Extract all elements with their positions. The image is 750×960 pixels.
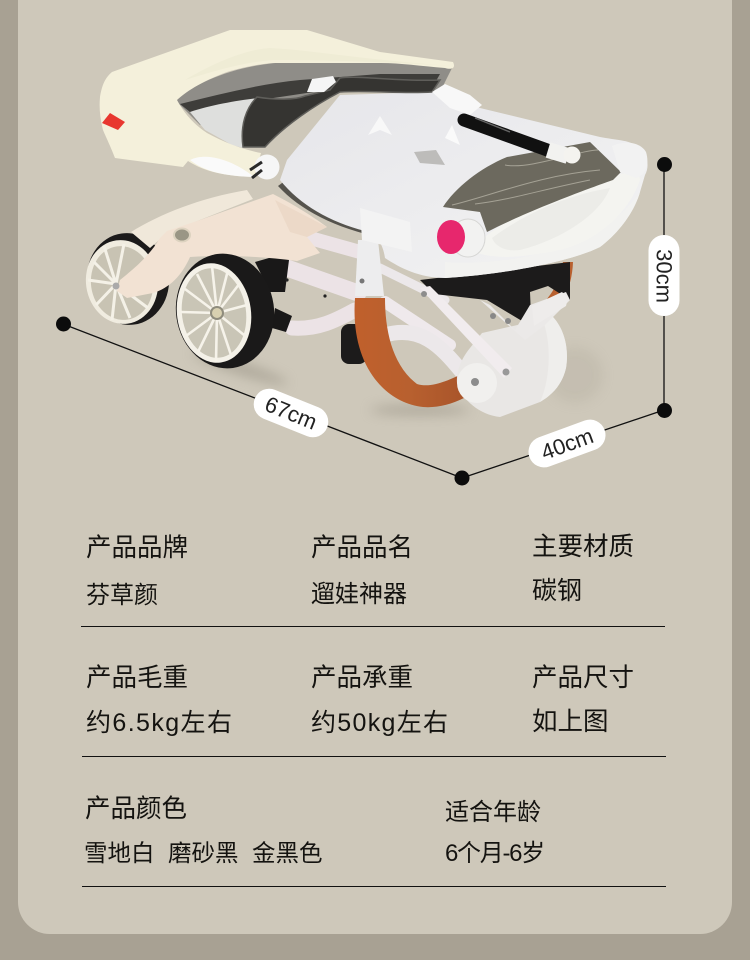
dimension: height 30cm: 30cm bbox=[652, 249, 676, 303]
seat shell bbox=[280, 92, 648, 278]
dark rim under seat bbox=[278, 180, 382, 238]
seat belt housing bbox=[360, 208, 412, 252]
post bbox=[355, 240, 384, 296]
canopy interior bbox=[175, 62, 453, 125]
size value: 如上图 bbox=[532, 708, 609, 736]
beige side rail bbox=[131, 190, 253, 248]
peach arm and fork bbox=[117, 194, 327, 298]
spec row 3: colours: 产品颜色 bbox=[85, 795, 187, 823]
colour values: 雪地白 bbox=[84, 840, 154, 866]
spec row 2: load: 产品承重 bbox=[311, 664, 413, 692]
footrest fabric bbox=[443, 142, 621, 232]
load value: 约50kg左右 bbox=[311, 709, 449, 737]
stroller bbox=[81, 30, 648, 417]
rear wheel bbox=[81, 228, 175, 330]
colour values bbox=[84, 840, 322, 866]
seat mesh bbox=[190, 98, 258, 148]
material value: 碳钢 bbox=[532, 577, 582, 605]
gross weight value: 约6.5kg左右 bbox=[86, 709, 233, 737]
spec row 1: material: 主要材质 bbox=[532, 533, 634, 561]
colour values: 金黑色 bbox=[252, 840, 322, 866]
black bar bbox=[464, 120, 550, 151]
far orange tube bbox=[534, 262, 573, 322]
front wheel block bbox=[420, 286, 570, 417]
seat details bbox=[368, 116, 392, 135]
stroller illustration with dimensions bbox=[56, 30, 680, 486]
canopy bbox=[100, 30, 454, 177]
dimension: height 30cm bbox=[648, 157, 680, 418]
top clip bbox=[432, 84, 482, 115]
canopy hinge clip bbox=[250, 154, 280, 180]
dimension: length 67cm: 67cm bbox=[261, 391, 321, 435]
dark harness bbox=[242, 77, 440, 147]
spec row 2: gross weight: 产品毛重 bbox=[86, 664, 188, 692]
name value: 遛娃神器 bbox=[311, 581, 407, 608]
colour values: 磨砂黑 bbox=[168, 840, 238, 866]
spec row 1: name: 产品品名 bbox=[311, 534, 413, 562]
spec row 3: age: 适合年龄 bbox=[445, 799, 541, 826]
front wheel bbox=[168, 247, 282, 375]
dimension: length 67cm bbox=[56, 316, 462, 478]
frame tubes bbox=[287, 238, 462, 372]
ground shadows bbox=[191, 347, 603, 415]
canopy label bbox=[102, 113, 125, 130]
frame joints bbox=[255, 252, 290, 292]
dimension: width 40cm: 40cm bbox=[538, 423, 597, 465]
pink button bbox=[437, 219, 485, 257]
age value: 6个月-6岁 bbox=[445, 840, 544, 867]
right knob bbox=[612, 143, 647, 178]
black bracket bbox=[420, 262, 570, 321]
folded footrest bowl bbox=[470, 173, 640, 257]
dimension: width 40cm bbox=[454, 410, 664, 486]
orange handle tube bbox=[355, 298, 464, 407]
spec row 1: brand: 产品品牌 bbox=[86, 534, 188, 562]
spec row 2: size: 产品尺寸 bbox=[532, 664, 634, 692]
brand value: 芬草颜 bbox=[86, 582, 158, 609]
